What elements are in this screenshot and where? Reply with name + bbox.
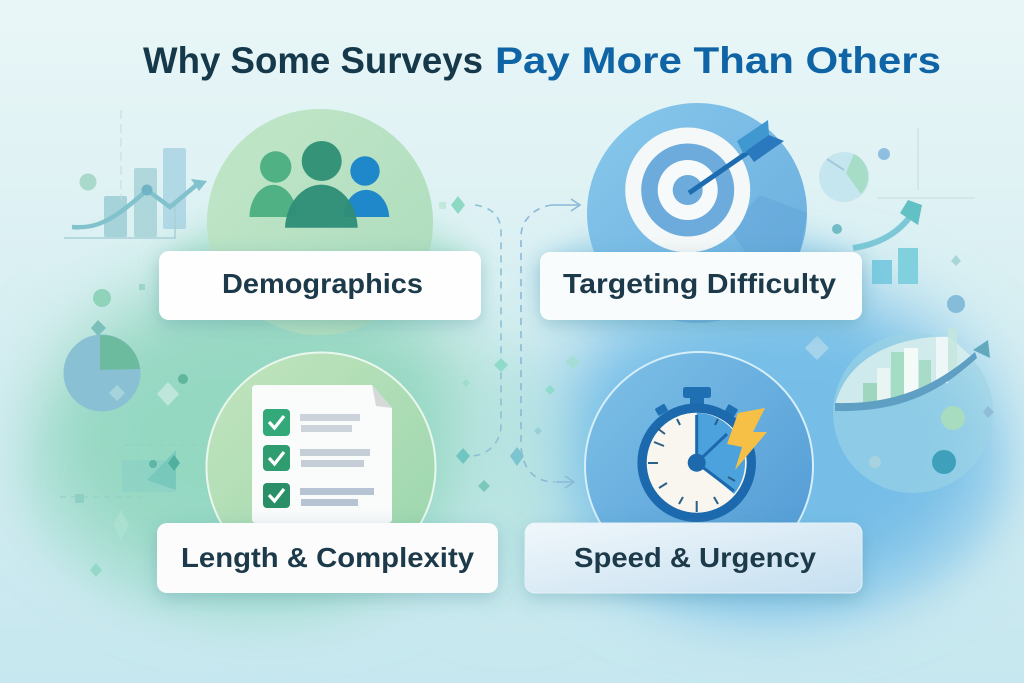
icon: stopwatch with lightning bolt bbox=[637, 387, 767, 522]
lower left chart decoration bbox=[60, 445, 205, 577]
right pie decoration bbox=[819, 128, 975, 234]
label: demographics: Demographics bbox=[222, 268, 423, 299]
label: speed and urgency bbox=[525, 523, 862, 593]
icon: target with arrow bbox=[625, 120, 784, 252]
dashed connector: right bbox=[462, 199, 580, 492]
title bbox=[143, 40, 941, 81]
panel: length and complexity bbox=[157, 352, 498, 593]
label: demographics bbox=[159, 251, 481, 320]
panel: demographics bbox=[159, 109, 481, 335]
icon: people bbox=[250, 141, 389, 228]
title: Pay More Than Others bbox=[495, 40, 941, 81]
label: length and complexity: Length & Complexity bbox=[181, 542, 474, 573]
label: speed and urgency: Speed & Urgency bbox=[574, 542, 816, 573]
right large circle chart decoration bbox=[805, 328, 994, 493]
left pie decoration bbox=[64, 284, 188, 412]
panel: targeting difficulty bbox=[540, 103, 862, 323]
label: targeting difficulty: Targeting Difficulty bbox=[563, 268, 836, 299]
left bar chart decoration bbox=[64, 110, 207, 238]
title: Why Some Surveys bbox=[143, 40, 483, 81]
right upward arrow and bars decoration bbox=[853, 200, 965, 313]
panel: speed and urgency bbox=[525, 352, 862, 593]
icon: checklist document bbox=[252, 385, 392, 523]
label: targeting difficulty bbox=[540, 252, 862, 320]
dashed connector: left bbox=[439, 196, 508, 464]
label: length and complexity bbox=[157, 523, 498, 593]
